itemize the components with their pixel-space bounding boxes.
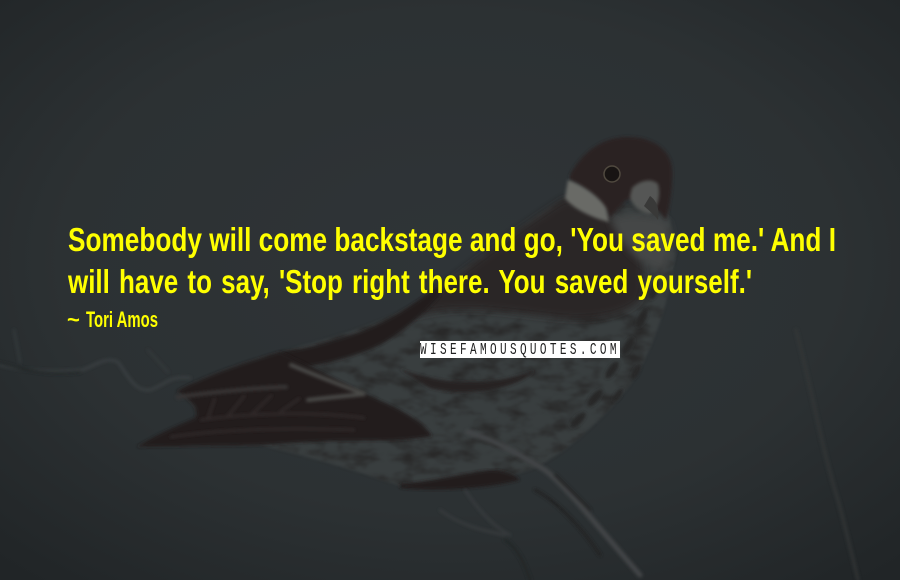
- illustration: faint branch at right: [796, 330, 858, 580]
- bird lower dark band: [400, 470, 520, 490]
- bird tail feathers: [137, 352, 432, 447]
- bird head: [570, 137, 672, 220]
- illustration: perched bird: [137, 137, 676, 490]
- attribution: [67, 307, 158, 332]
- attribution: Tori Amos: [86, 307, 158, 332]
- bird tail feather highlights: [170, 395, 365, 437]
- illustration: faint branch at left: [0, 330, 190, 390]
- bird beak: [644, 196, 659, 220]
- bird flank band: [398, 368, 535, 392]
- attribution: ~: [67, 307, 80, 332]
- bird body: [137, 197, 676, 487]
- illustration: foreground branches: [178, 365, 640, 580]
- bird mantle: [405, 198, 644, 320]
- watermark: WISEFAMOUSQUOTES.COM: [420, 341, 620, 360]
- bird face patch: [630, 181, 659, 214]
- bird primary feather band: [280, 286, 440, 368]
- bird eye: [604, 166, 620, 182]
- bird breast mottling: [568, 253, 667, 430]
- bird throat: [610, 215, 671, 272]
- bird cheek patch: [565, 180, 609, 222]
